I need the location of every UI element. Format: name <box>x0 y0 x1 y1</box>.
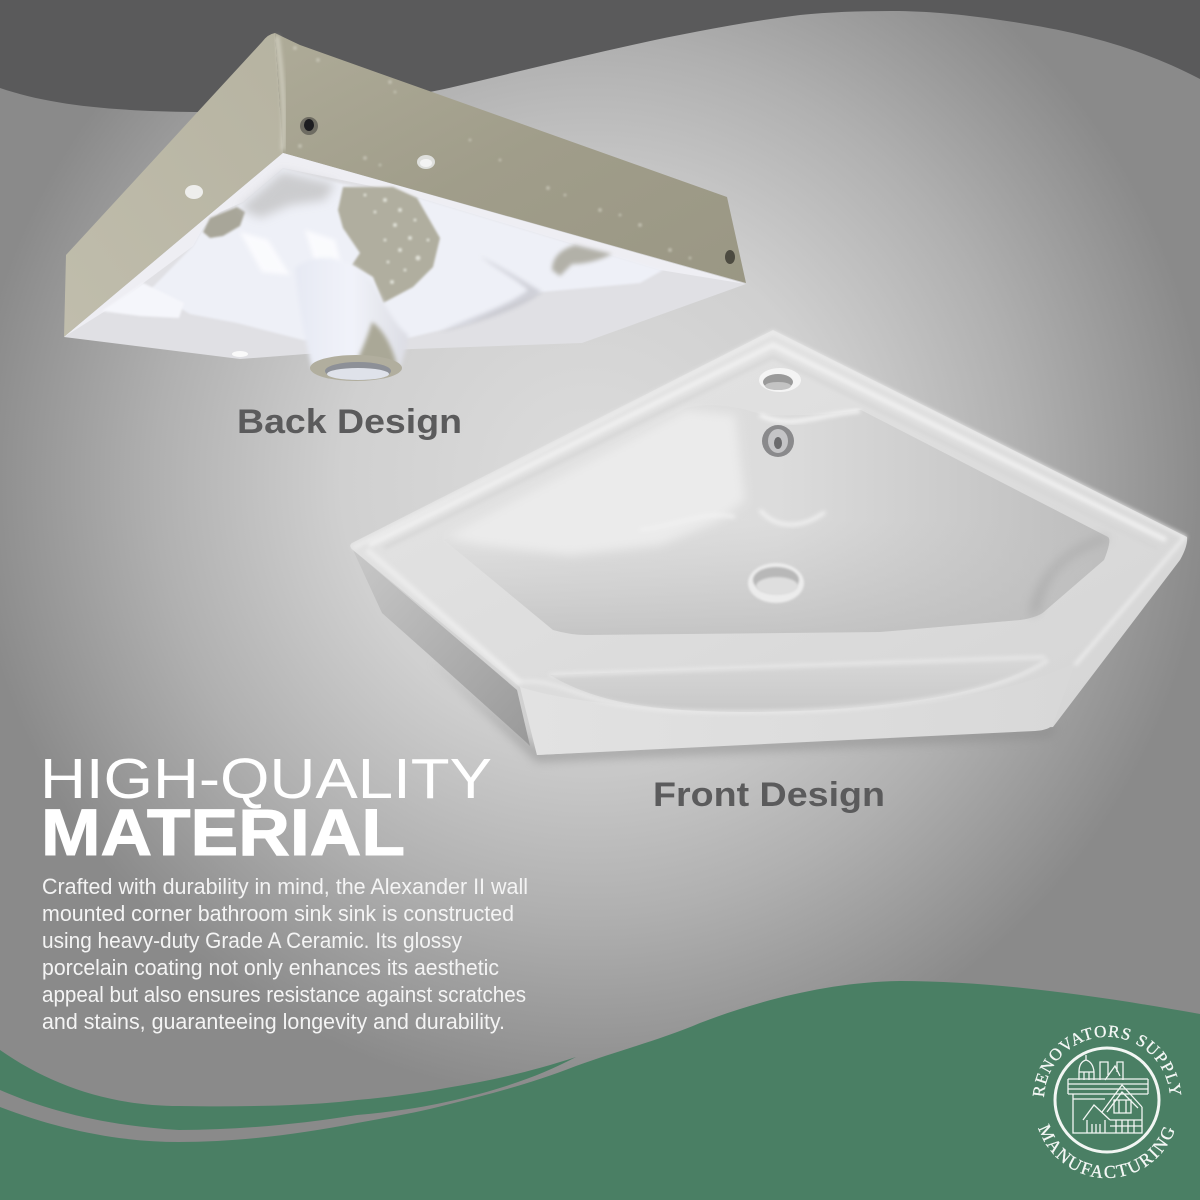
right basin shadow <box>1030 535 1108 618</box>
heading: high-quality material <box>40 747 492 869</box>
front design sink photo <box>350 330 1187 762</box>
rim band <box>64 153 746 337</box>
soft shadow <box>430 660 1060 762</box>
left side wall <box>353 550 530 746</box>
rim groove <box>384 357 1158 549</box>
logo: renovators supply manufacturing <box>1032 1025 1182 1178</box>
heading line one: HIGH-QUALITY <box>40 747 492 811</box>
label: back design: Back Design <box>237 403 462 441</box>
shelf edge highlight <box>518 657 1048 712</box>
back design sink photo <box>64 33 746 381</box>
exposed unglazed centre patch <box>338 187 440 303</box>
lower left rim ridge <box>367 550 520 683</box>
drain hole <box>748 563 804 603</box>
basin highlight <box>446 410 745 555</box>
flat grey underside <box>64 153 746 359</box>
left lobe <box>102 283 184 318</box>
logo ring <box>1055 1048 1159 1152</box>
soap shelf recess <box>550 657 1045 712</box>
body text <box>42 874 528 1034</box>
logo arc text bottom: MANUFACTURING <box>1038 1123 1174 1178</box>
right exposed patch <box>552 245 612 276</box>
front pentagon top surface <box>350 330 1187 755</box>
front face <box>520 663 1075 755</box>
glazed bowl <box>150 168 663 340</box>
wall corner highlight <box>277 36 284 150</box>
body text: porcelain coating not only enhances its aesthetic <box>42 955 499 980</box>
logo house <box>1068 1055 1148 1133</box>
green ground wave <box>0 981 1200 1200</box>
left exposed patch <box>203 207 245 238</box>
left olive wall <box>64 33 283 337</box>
overflow fitting <box>762 425 794 457</box>
basin bowl <box>444 405 1109 635</box>
drain tube <box>295 258 408 368</box>
body text: using heavy-duty Grade A Ceramic. Its glossy <box>42 928 462 953</box>
right olive wall <box>275 33 746 283</box>
bowl dark folds <box>440 256 542 332</box>
patch speckles <box>364 194 430 284</box>
basin lower shade <box>444 405 1109 635</box>
centre ridge <box>760 510 825 525</box>
top dark wave <box>0 0 1200 112</box>
wall speckles <box>293 46 692 260</box>
label: front design: Front Design <box>653 776 885 814</box>
body text: and stains, guaranteeing longevity and durability. <box>42 1009 505 1034</box>
body text: Crafted with durability in mind, the Alexander II wall <box>42 874 528 899</box>
bottom green wave with swoosh <box>0 981 1200 1200</box>
heading line two: MATERIAL <box>41 796 405 869</box>
drain tube olive strip <box>355 322 397 365</box>
body text: appeal but also ensures resistance against scratches <box>42 982 526 1007</box>
bowl highlights <box>240 230 345 285</box>
green swoosh <box>0 1050 576 1130</box>
rim ridge left and top <box>369 345 1166 545</box>
logo arc text top: RENOVATORS SUPPLY <box>1032 1025 1182 1098</box>
mounting holes <box>300 117 318 135</box>
faucet hole <box>759 368 801 392</box>
outer rim highlight <box>353 332 1185 665</box>
drain opening <box>310 355 402 381</box>
soft grey glaze fade <box>240 172 335 218</box>
body text: mounted corner bathroom sink sink is constructed <box>42 901 514 926</box>
